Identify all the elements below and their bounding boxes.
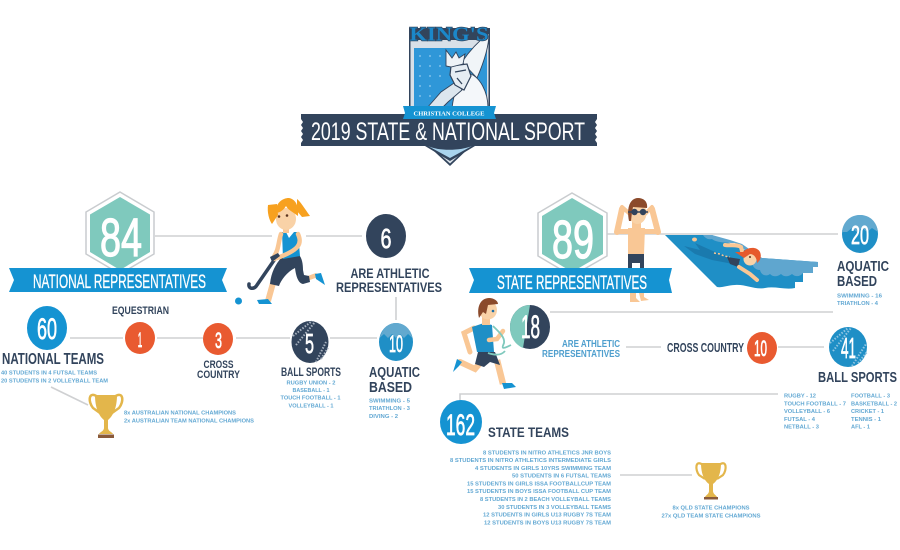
state hexagon 89: 89 <box>552 210 594 270</box>
cross country state <box>667 332 777 364</box>
state representatives banner: STATE REPRESENTATIVES <box>497 273 647 294</box>
christian college text: CHRISTIAN COLLEGE <box>414 110 484 118</box>
icon: trophy state <box>696 463 726 500</box>
logo wordmark: KING'S <box>410 24 488 46</box>
state champions text <box>662 506 761 520</box>
icon: standing swimmer with goggles <box>615 198 660 302</box>
ball sports state: TOUCH FOOTBALL - 7 <box>784 402 846 408</box>
swimmer arms <box>725 245 742 251</box>
ball sports state: FUTSAL - 4 <box>784 417 816 423</box>
state teams list: 12 STUDENTS IN BOYS U13 RUGBY 7S TEAM <box>484 520 611 526</box>
goggles <box>628 211 648 213</box>
circle 18 <box>510 305 550 349</box>
aquatic based national: SWIMMING - 5 <box>369 398 411 404</box>
aquatic based state: SWIMMING - 16 <box>837 294 883 300</box>
national champions text <box>124 410 254 424</box>
state athletic label: ARE ATHLETIC <box>562 338 620 350</box>
national hexagon 84 <box>86 192 154 274</box>
state representatives banner <box>469 268 672 294</box>
aquatic based national: TRIATHLON - 3 <box>369 406 411 412</box>
ball sports national: BASEBALL - 1 <box>292 388 330 394</box>
swimmer head <box>744 252 756 266</box>
right arm <box>489 331 503 340</box>
ball sports state: RUGBY - 12 <box>784 394 817 400</box>
athletic label <box>336 266 442 295</box>
circle 60: 60 <box>37 313 57 346</box>
aquatic based national: BASED <box>369 380 412 396</box>
national teams details <box>1 370 108 384</box>
arm and spear <box>427 81 462 108</box>
national champions text: 8x AUSTRALIAN NATIONAL CHAMPIONS <box>124 410 236 416</box>
state champions text: 8x QLD STATE CHAMPIONS <box>672 506 750 512</box>
aquatic based national: 10 <box>389 331 403 358</box>
leggings <box>270 255 310 286</box>
arms <box>273 234 281 258</box>
left arm <box>464 328 474 352</box>
icon: runner <box>453 298 516 389</box>
ball sports national <box>280 321 341 410</box>
state teams list: 15 STUDENTS IN GIRLS ISSA FOOTBALLCUP TEAM <box>467 482 611 488</box>
ball sports national: 5 <box>305 328 314 359</box>
state teams list: 15 STUDENTS IN BOYS ISSA FOOTBALL CUP TEAM <box>467 489 611 495</box>
head <box>482 316 490 325</box>
national teams details: 20 STUDENTS IN 2 VOLLEYBALL TEAM <box>1 378 108 384</box>
national representatives banner: NATIONAL REPRESENTATIVES <box>33 272 206 293</box>
ball sports state: CRICKET - 1 <box>851 409 885 415</box>
front leg and shoe <box>497 360 503 384</box>
back calf and shoe <box>306 275 317 279</box>
surfboard <box>462 33 489 78</box>
cross country national: 3 <box>215 328 222 353</box>
finish ribbon <box>488 326 511 355</box>
cross country national: CROSS <box>204 359 234 371</box>
athletic label: ARE ATHLETIC <box>350 266 430 281</box>
body <box>452 73 488 108</box>
torso <box>628 228 645 254</box>
swimmer legs and body <box>684 243 733 264</box>
aquatic based state: 20 <box>851 220 869 250</box>
cross country national: COUNTRY <box>197 369 241 381</box>
logo shield <box>409 28 490 166</box>
head <box>283 226 289 233</box>
national teams heading: NATIONAL TEAMS <box>2 351 104 368</box>
circle 162 <box>440 400 482 444</box>
aquatic based national <box>369 323 420 420</box>
circle 162: 162 <box>446 409 475 442</box>
icon: trophy national <box>90 395 122 438</box>
stick <box>249 256 277 288</box>
national teams <box>1 306 108 384</box>
torso <box>472 323 494 352</box>
swimmer foot <box>692 238 697 242</box>
ball sports state: FOOTBALL - 3 <box>851 394 891 400</box>
ball sports national: RUGBY UNION - 2 <box>286 380 336 386</box>
cross country state: 10 <box>754 336 767 361</box>
ball sports state: 41 <box>841 333 856 365</box>
state teams list: 50 STUDENTS IN 6 FUTSAL TEAMS <box>512 474 611 480</box>
aquatic based national: AQUATIC <box>369 365 420 381</box>
state teams <box>440 400 611 526</box>
ball sports state: TENNIS - 1 <box>851 417 882 423</box>
state teams list: 12 STUDENTS IN GIRLS U13 RUGBY 7S TEAM <box>483 512 611 518</box>
title ribbon <box>301 114 597 146</box>
state teams heading: STATE TEAMS <box>488 424 569 440</box>
title: 2019 STATE & NATIONAL SPORT <box>311 118 585 146</box>
state teams list: 4 STUDENTS IN GIRLS 10YRS SWIMMING TEAM <box>475 466 611 472</box>
ball sports state: NETBALL - 3 <box>784 424 820 430</box>
state athletic label <box>542 338 620 360</box>
state teams list <box>450 450 611 526</box>
national hexagon 84: 84 <box>100 208 142 268</box>
icon: pool wave and swimmer <box>665 235 818 289</box>
feet <box>630 293 649 302</box>
state athletic label: REPRESENTATIVES <box>542 348 620 360</box>
ball sports national: BALL SPORTS <box>281 365 341 379</box>
ball <box>235 298 242 304</box>
ball sports state: AFL - 1 <box>851 424 871 430</box>
light water <box>703 235 818 276</box>
ball sports state: BASKETBALL - 2 <box>851 402 898 408</box>
back leg and shoe <box>460 362 481 369</box>
state teams list: 8 STUDENTS IN NITRO ATHLETICS INTERMEDIATE GIRLS <box>450 458 611 464</box>
state teams list: 8 STUDENTS IN 2 BEACH VOLLEYBALL TEAMS <box>480 497 611 503</box>
dark water <box>665 235 818 289</box>
ball sports state <box>784 327 898 430</box>
national champions text: 2x AUSTRALIAN TEAM NATIONAL CHAMPIONS <box>124 418 254 424</box>
equestrian: EQUESTRIAN <box>112 305 169 317</box>
icon: hockey player <box>235 198 325 304</box>
cross country state: CROSS COUNTRY <box>667 341 744 355</box>
christian college ribbon <box>403 106 496 119</box>
cross country national <box>197 323 241 381</box>
ball sports national: VOLLEYBALL - 1 <box>288 404 334 410</box>
national teams details: 40 STUDENTS IN 4 FUTSAL TEAMS <box>1 370 97 376</box>
head <box>632 220 641 230</box>
front lower leg and shoe <box>268 283 273 301</box>
aquatic based state: BASED <box>837 274 877 290</box>
state teams list: 30 STUDENTS IN 3 VOLLEYBALL TEAMS <box>498 505 611 511</box>
arms <box>617 209 658 232</box>
circle 18: 18 <box>521 309 540 345</box>
trunks <box>628 254 644 268</box>
aquatic based national: DIVING - 2 <box>369 414 399 420</box>
state champions text: 27x QLD TEAM STATE CHAMPIONS <box>662 514 761 520</box>
athletic label: REPRESENTATIVES <box>336 280 442 295</box>
ball sports national: TOUCH FOOTBALL - 1 <box>280 396 341 402</box>
ball sports state: VOLLEYBALL - 6 <box>784 409 831 415</box>
aquatic based state: TRIATHLON - 4 <box>837 301 879 307</box>
header: logo and title <box>301 24 597 166</box>
face and beard <box>450 64 471 90</box>
national representatives banner <box>9 268 227 293</box>
top <box>282 232 300 259</box>
state hexagon 89 <box>538 193 607 276</box>
circle 6: 6 <box>380 223 392 254</box>
aquatic based state <box>837 215 889 307</box>
state teams list: 8 STUDENTS IN NITRO ATHLETICS JNR BOYS <box>483 450 611 456</box>
crown <box>446 50 465 67</box>
athletic representatives count <box>336 214 442 295</box>
equestrian: 1 <box>138 329 142 352</box>
equestrian <box>112 305 169 354</box>
shorts <box>475 352 500 367</box>
